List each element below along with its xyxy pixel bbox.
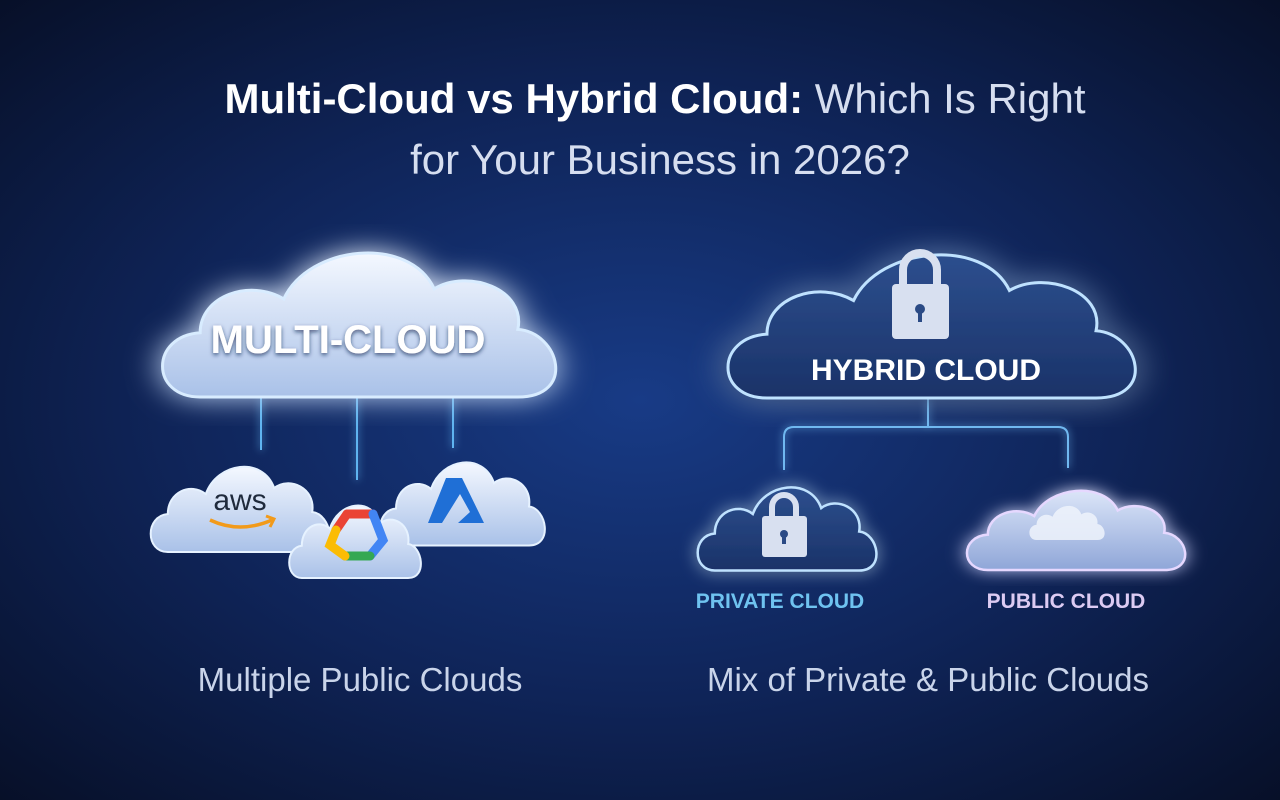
title: for Your Business in 2026? bbox=[410, 136, 910, 183]
icon: lock bbox=[892, 253, 949, 339]
cloud: azure bbox=[380, 462, 545, 546]
caption: multi-cloud: Multiple Public Clouds bbox=[198, 661, 522, 698]
title bbox=[224, 75, 1086, 183]
icon: aws logo bbox=[210, 484, 274, 527]
cloud: private bbox=[698, 487, 876, 570]
title: Multi-Cloud vs Hybrid Cloud: Which Is Right bbox=[224, 75, 1086, 122]
icon: aws logo: aws bbox=[213, 484, 267, 517]
cloud: google bbox=[289, 506, 421, 578]
cloud: multi-cloud main bbox=[163, 253, 556, 397]
label: HYBRID CLOUD: HYBRID CLOUD bbox=[811, 354, 1041, 387]
connectors: hybrid bbox=[784, 398, 1068, 470]
icon: small lock bbox=[762, 495, 807, 557]
label: public cloud: PUBLIC CLOUD bbox=[987, 590, 1145, 613]
label: private cloud: PRIVATE CLOUD bbox=[696, 590, 864, 613]
icon: azure logo bbox=[428, 478, 484, 523]
icon: google cloud logo bbox=[330, 514, 383, 556]
cloud: public bbox=[967, 491, 1185, 570]
caption: hybrid: Mix of Private & Public Clouds bbox=[707, 661, 1149, 698]
label: MULTI-CLOUD: MULTI-CLOUD bbox=[211, 318, 485, 362]
connectors: multi-cloud bbox=[261, 397, 453, 480]
cloud: aws bbox=[151, 467, 329, 552]
cloud: hybrid main bbox=[728, 253, 1135, 398]
